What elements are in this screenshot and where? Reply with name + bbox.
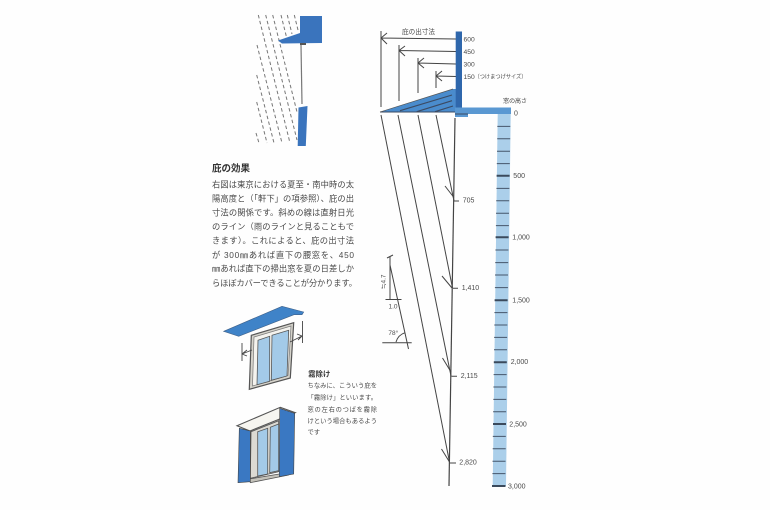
drop line labels [459, 198, 479, 466]
dimension values: 150 [464, 74, 475, 81]
dimension values: 300 [464, 62, 475, 68]
text block: 霧除け explanation: 「霧除け」といいます。 [308, 392, 377, 402]
text block: 霧除け explanation: 窓の左右のつばを霧除 [308, 404, 378, 414]
eave block [278, 16, 322, 44]
ceiling [455, 108, 511, 117]
dimension values: （つけまつげサイズ） [474, 72, 526, 80]
wall [456, 32, 462, 108]
ruler values [508, 110, 530, 490]
ruler values: 1,500 [512, 298, 530, 304]
text block: explanation: 右図は東京における夏至・南中時の太 [212, 179, 355, 189]
dimension arrows [242, 321, 302, 361]
text block: 霧除け explanation [308, 382, 378, 436]
icon: window with eave [224, 306, 304, 389]
text block: 霧除け explanation: ちなみに、こういう庇を [308, 382, 377, 390]
diagram: sun angle triangle [380, 255, 412, 349]
chart: window height ruler [492, 97, 530, 490]
ruler values: 500 [513, 173, 525, 180]
heading: 庇の効果: 庇の効果 [212, 162, 250, 174]
drop line labels: 1,410 [462, 285, 479, 292]
text block: 霧除け explanation: けという場合もあるよう [308, 416, 377, 425]
drop line labels: 705 [463, 198, 474, 204]
text block: explanation: 陽高度と（「軒下」の項参照）、庇の出 [212, 194, 354, 204]
ruler heading: 窓の高さ [503, 97, 527, 105]
dimension values: 600 [464, 36, 475, 44]
heading: 庇の出寸法: 庇の出寸法 [402, 27, 435, 36]
drop line labels: 2,820 [459, 460, 477, 466]
text block: 霧除け explanation: です [308, 428, 320, 436]
text block: explanation: ㎜あれば直下の掃出窓を夏の日差しか [212, 264, 354, 274]
text block: explanation [212, 179, 357, 288]
eave wedge [380, 89, 456, 112]
rain dashes [256, 15, 298, 143]
dimension values: 450 [464, 49, 475, 56]
sun lines [381, 115, 454, 462]
eave [224, 306, 304, 336]
diagram: sun angle triangle: 78° [388, 329, 399, 337]
drop line ticks [450, 201, 459, 463]
diagram: eave projection and sun lines [380, 27, 526, 486]
text block: explanation: らほぼカバーできることが分かります。 [212, 278, 357, 288]
ruler ticks [492, 126, 510, 474]
ruler values: 3,000 [508, 484, 526, 490]
diagram: sun angle triangle: ≒4.7 [380, 274, 388, 289]
icon: window with side fins [237, 407, 295, 483]
text block: explanation: きます）。これによると、庇の出寸法 [212, 236, 355, 246]
ruler values: 2,500 [509, 422, 527, 428]
ruler values: 2,000 [511, 359, 528, 366]
text block: explanation: のライン（雨のラインと見ることもで [212, 221, 354, 231]
vertical drop line [449, 118, 455, 486]
text block: explanation: が 300㎜あれば直下の腰窓を、450 [212, 250, 354, 260]
ruler values: 1,000 [512, 234, 530, 242]
drop line labels: 2,115 [461, 373, 478, 380]
projection guide lines [381, 31, 456, 107]
suspended rod [301, 45, 302, 104]
lower wall [298, 106, 308, 146]
ruler values: 0 [514, 110, 518, 118]
dimension values [464, 36, 526, 81]
diagram: sun angle triangle: 1.0 [388, 304, 398, 310]
heading: 霧除け: 霧除け [308, 370, 330, 378]
icon: eave section with rain [256, 15, 322, 146]
text block: explanation: 寸法の関係です。斜めの線は直射日光 [212, 207, 354, 217]
